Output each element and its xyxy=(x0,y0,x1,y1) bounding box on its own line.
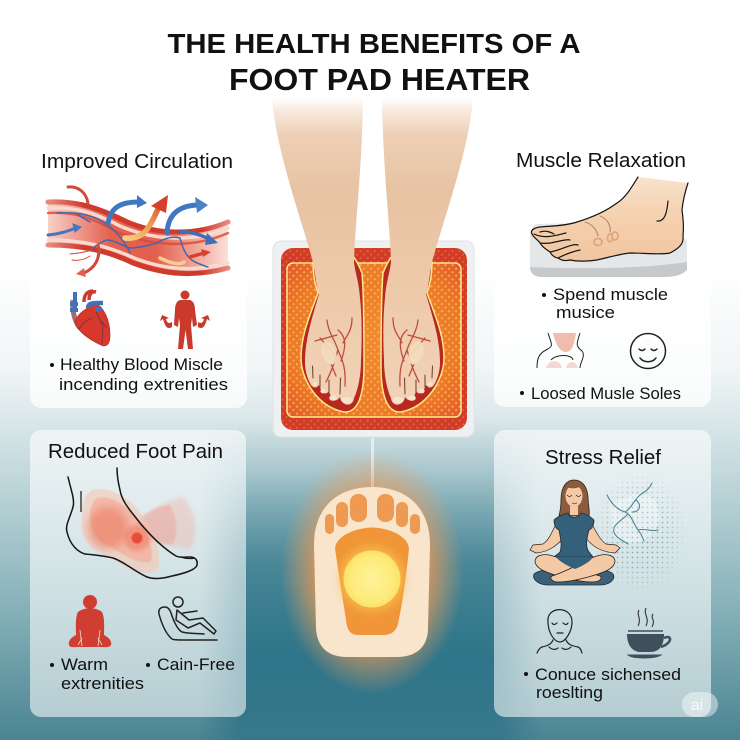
right leg xyxy=(382,98,473,405)
controller: foot shaped heater remote xyxy=(280,450,464,694)
list: stress text: roeslting xyxy=(536,683,603,702)
illustration: foot with heat map xyxy=(67,468,197,579)
icon: calm face xyxy=(537,610,582,653)
heading: stress relief: Stress Relief xyxy=(545,447,661,469)
list: spend muscle xyxy=(542,285,668,322)
illustration: blood vessel with flow arrows xyxy=(48,187,228,277)
icon: heart xyxy=(70,291,110,346)
illustration: foot on cushion xyxy=(530,177,688,277)
list: warm extremities: Warm xyxy=(61,655,108,674)
title: FOOT PAD HEATER xyxy=(229,62,530,97)
watermark: ai badge xyxy=(682,692,718,717)
heading: muscle relaxation: Muscle Relaxation xyxy=(516,150,686,172)
icon: body with arrows xyxy=(160,290,210,349)
list: spend muscle: musice xyxy=(556,303,615,322)
title xyxy=(168,28,580,97)
illustration: meditating woman xyxy=(530,480,620,585)
list: warm extremities xyxy=(50,655,144,693)
foot outline: left heat zone xyxy=(301,256,364,412)
icon: neck and shoulders xyxy=(537,333,583,368)
list: circulation text: Healthy Blood Miscle xyxy=(60,355,223,374)
list: warm extremities: extrenities xyxy=(61,674,144,693)
left leg xyxy=(272,98,363,405)
foot pad heater mat xyxy=(273,241,474,437)
heading: reduced foot pain: Reduced Foot Pain xyxy=(48,441,223,463)
title: THE HEALTH BENEFITS OF A xyxy=(168,28,580,59)
foot outline: right heat zone xyxy=(381,256,444,412)
icon: seated person xyxy=(69,595,111,647)
panel: reduced foot pain xyxy=(30,430,246,717)
heading: improved circulation: Improved Circulation xyxy=(41,151,233,173)
watermark: ai badge: ai xyxy=(691,697,703,714)
list: circulation text: incending extrenities xyxy=(59,375,228,394)
panel: stress relief xyxy=(494,430,711,717)
list: spend muscle: Spend muscle xyxy=(553,285,668,304)
controller cord xyxy=(371,438,374,487)
list: cain-free: Cain-Free xyxy=(157,655,235,674)
illustration: dissolving stress dots xyxy=(596,476,684,588)
legs and feet xyxy=(272,98,473,405)
list: stress text xyxy=(524,665,681,702)
background xyxy=(0,322,740,740)
icon: coffee cup xyxy=(627,608,670,658)
icon: smile xyxy=(630,334,666,368)
panel: muscle relaxation xyxy=(494,142,711,407)
panel: improved circulation xyxy=(30,142,247,408)
list: stress text: Conuce sichensed xyxy=(535,665,681,684)
list: loosed muscle: Loosed Musle Soles xyxy=(531,384,681,403)
icon: recliner xyxy=(159,597,217,640)
list: circulation text xyxy=(50,355,228,394)
